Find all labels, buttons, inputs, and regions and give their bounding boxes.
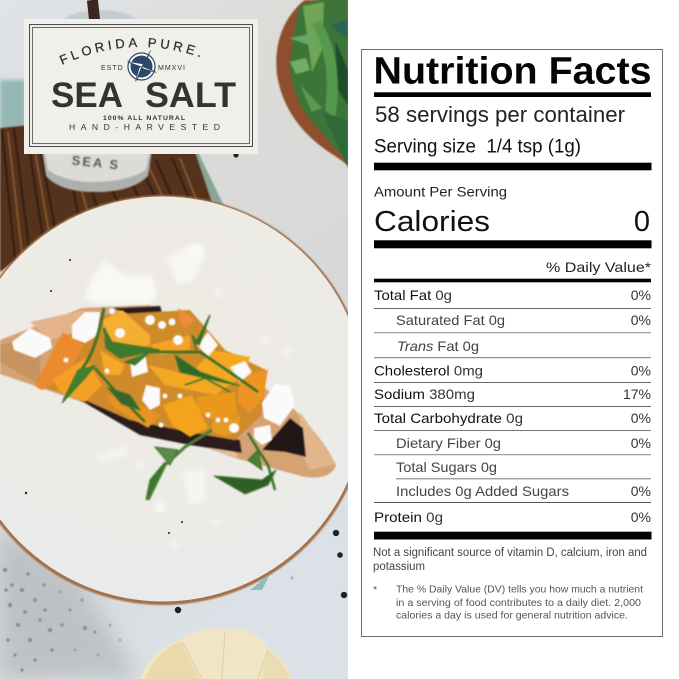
natural tagline: 100% ALL NATURAL [103,115,185,122]
servings per container: 58 servings per container [375,102,625,127]
product name [51,76,236,115]
serving size: Serving size 1/4 tsp (1g) [374,136,581,158]
product name: SEA [51,76,123,115]
established text [101,65,186,72]
row: saturated fat [396,312,651,328]
row: sodium: Sodium 380mg [374,386,475,402]
icon: feta cheese [12,308,295,445]
icon: bowl of arugula [276,0,348,168]
photo: sea salt on squash toast [0,0,368,679]
row: sodium [374,386,651,402]
footnote: daily value explanation: in a serving of food contributes to a daily diet. 2,000 [396,597,641,609]
footnote: daily value explanation: * [373,584,377,596]
icon: peppercorns [175,152,347,613]
icon: darker concrete patch [0,530,140,679]
icon: plate specks [25,259,183,534]
icon: compass rose [128,50,156,82]
icon: teal cloth corner under plate [250,574,270,590]
row: total carbohydrate [374,410,651,426]
established text: MMXVI [158,65,186,72]
icon: green cloth edge under board [195,154,224,205]
row: total fat: Total Fat 0g [374,287,452,303]
established text: ESTD [101,65,124,72]
row: added sugars: Includes 0g Added Sugars [396,483,569,499]
row: total fat: 0% [631,287,651,303]
row: cholesterol [374,362,651,378]
panel: nutrition facts [362,50,662,636]
footnote: daily value explanation [373,584,643,622]
heading: Nutrition Facts: Nutrition Facts [374,50,652,92]
row: added sugars [396,483,651,499]
row: saturated fat: 0% [631,312,651,328]
footnote: daily value explanation: The % Daily Value (DV) tells you how much a nutrient [396,584,643,596]
footnote: daily value explanation: calories a day is used for general nutrition advice. [396,610,628,622]
nutrient rows [374,287,651,525]
row: total carbohydrate: 0% [631,410,651,426]
icon: wooden board [0,125,213,272]
icon: salt crumbles on plate [85,244,291,548]
logo label: Florida Pure Sea Salt [24,19,258,154]
amount per serving: Amount Per Serving [374,184,507,200]
icon: sea salt jar: SEA S [71,153,121,173]
row: protein [374,509,651,525]
row: protein: Protein 0g [374,509,443,525]
row: cholesterol: Cholesterol 0mg [374,362,483,378]
calories [374,206,650,238]
icon: jar lid behind label [64,10,136,19]
row: protein: 0% [631,509,651,525]
daily value heading: % Daily Value* [546,259,652,275]
row: cholesterol: 0% [631,362,651,378]
icon: speckled table texture [3,568,293,672]
row: trans fat: Trans Fat 0g [397,338,479,354]
arched brand text: FLORIDA PURE. [59,38,200,65]
row: dietary fiber [396,435,651,451]
icon: teal cloth [0,80,26,130]
row: sodium: 17% [623,386,651,402]
calories: Calories [374,206,490,238]
footnote: not a significant source [373,547,647,573]
row: dietary fiber: Dietary Fiber 0g [396,435,501,451]
hand-harvested tagline: HAND-HARVESTED [69,122,220,132]
row: total carbohydrate: Total Carbohydrate 0g [374,410,523,426]
icon: sea salt jar [42,150,152,192]
row: total sugars: Total Sugars 0g [396,459,497,475]
icon: straw [87,0,100,20]
footnote: not a significant source: potassium [373,561,425,573]
row: saturated fat: Saturated Fat 0g [396,312,505,328]
footnote: not a significant source: Not a significant source of vitamin D, calcium, iron and [373,547,647,559]
icon: arugula leaves [62,308,276,500]
product name: SALT [145,76,236,115]
row: dietary fiber: 0% [631,435,651,451]
icon: squash pieces [36,308,268,437]
row: added sugars: 0% [631,483,651,499]
row: total fat [374,287,651,303]
icon: toast [0,305,336,478]
icon: plate [0,195,368,605]
calories: 0 [634,206,650,238]
icon: pumpkin [140,628,292,679]
